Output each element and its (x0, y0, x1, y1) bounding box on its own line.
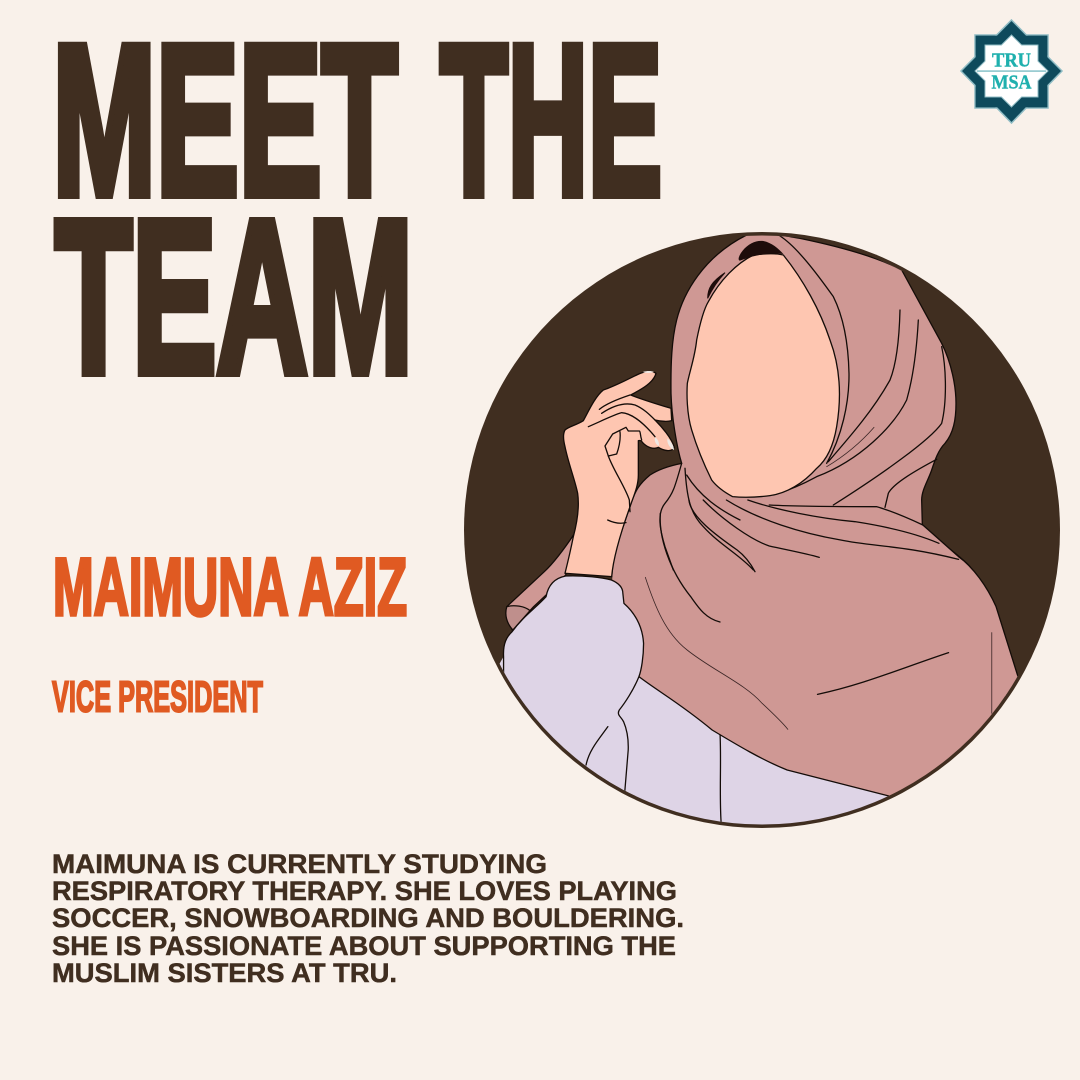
biography: RESPIRATORY THERAPY. SHE LOVES PLAYING (52, 876, 677, 906)
logo (961, 20, 1062, 123)
title: THE (440, 1, 662, 240)
biography (52, 849, 684, 988)
dark circle (464, 232, 1060, 828)
hijab folds (660, 236, 945, 570)
portrait illustration (464, 232, 1060, 847)
biography: MUSLIM SISTERS AT TRU. (52, 958, 397, 988)
title (52, 1, 662, 419)
hand (563, 371, 674, 577)
biography: SOCCER, SNOWBOARDING AND BOULDERING. (52, 903, 684, 933)
role: VICE PRESIDENT (52, 672, 263, 722)
title: MEET (52, 1, 398, 240)
dark hair (708, 241, 783, 298)
hijab (613, 234, 1007, 697)
face (687, 254, 839, 497)
name: MAIMUNA AZIZ (53, 542, 407, 633)
sleeve (494, 576, 644, 793)
hijab lower drape (612, 500, 1051, 796)
biography: MAIMUNA IS CURRENTLY STUDYING (52, 849, 547, 879)
logo text: TRU (992, 50, 1031, 72)
lavender shirt (500, 658, 888, 824)
biography: SHE IS PASSIONATE ABOUT SUPPORTING THE (52, 931, 676, 961)
logo text: MSA (992, 72, 1032, 94)
logo text (992, 50, 1032, 94)
title: TEAM (55, 176, 413, 419)
hijab back piece (506, 533, 576, 630)
icon: logo star (961, 20, 1062, 123)
